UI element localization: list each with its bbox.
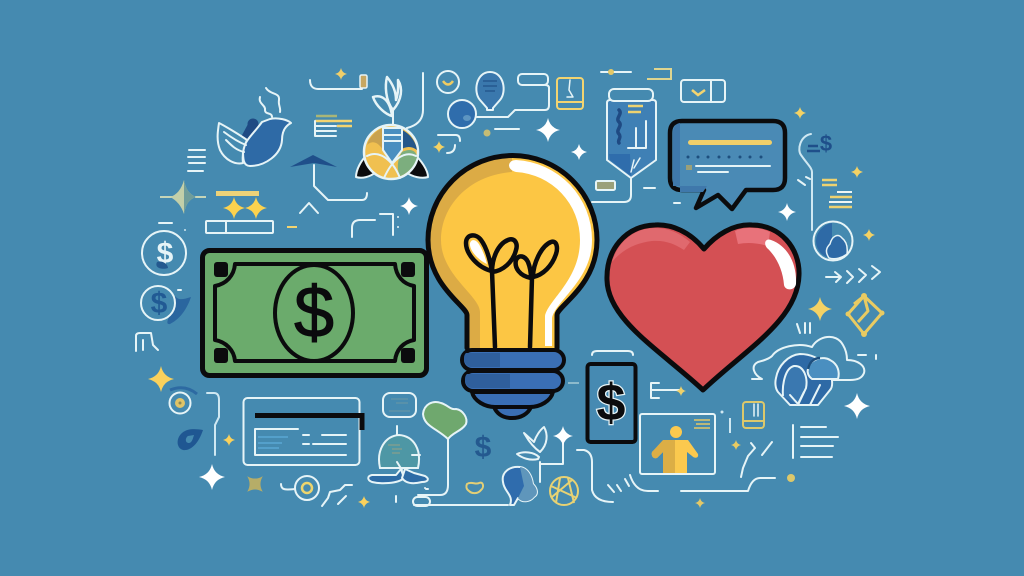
icon: speech bubble xyxy=(670,121,785,209)
gold stars and bar xyxy=(206,191,273,233)
right upper cluster xyxy=(778,107,875,241)
icon: dollar bill xyxy=(202,250,426,376)
top dash and bracket xyxy=(601,69,671,79)
icon: yellow kidney xyxy=(466,483,483,493)
icon: light bulb xyxy=(428,156,597,418)
icon: phone with dollar: $ xyxy=(597,374,626,432)
compass star xyxy=(160,180,206,214)
small line elements top left xyxy=(188,68,367,227)
icon: bird xyxy=(218,88,291,166)
icon: yellow book top xyxy=(557,78,583,109)
icon: person picture xyxy=(640,414,715,474)
icon: check box xyxy=(681,80,725,102)
left lower small icons xyxy=(148,366,271,500)
icon: phone with dollar xyxy=(588,351,636,442)
icon: chevrons arrow xyxy=(826,266,880,283)
icon: yellow wheel xyxy=(550,477,578,505)
bottom connectors xyxy=(568,383,795,508)
filament xyxy=(466,235,557,347)
icon: dollar coins left: $ xyxy=(151,287,168,320)
icon: yellow book lower xyxy=(743,402,764,428)
icon: seedling globe xyxy=(356,73,428,179)
icon: card panel xyxy=(244,398,362,465)
icon: blue dollar: $ xyxy=(475,431,492,464)
icon: dollar coins left: $ xyxy=(157,237,174,270)
icon: target and squiggles xyxy=(281,476,370,508)
bulb base xyxy=(462,350,564,418)
icon: arrow with bracket xyxy=(651,383,686,398)
icon: dollar bill: $ xyxy=(294,273,334,353)
small corner lines and star near bulb xyxy=(352,197,418,237)
icon: heart xyxy=(607,225,799,390)
right upper cluster: $ xyxy=(820,131,832,156)
icon: cloud cluster xyxy=(752,323,876,405)
icon: plant sprout and star xyxy=(517,426,573,482)
icon: green tree xyxy=(414,402,508,505)
icon: brain circle xyxy=(814,222,852,260)
icon: head silhouette xyxy=(503,467,537,505)
right lower small elements xyxy=(720,393,870,477)
icon: bottle xyxy=(592,89,680,203)
top centre circle icons xyxy=(433,71,587,160)
icon: figure with dome xyxy=(368,393,430,506)
right gold star and diamond xyxy=(808,293,884,337)
icon: dollar coins left xyxy=(136,223,191,351)
